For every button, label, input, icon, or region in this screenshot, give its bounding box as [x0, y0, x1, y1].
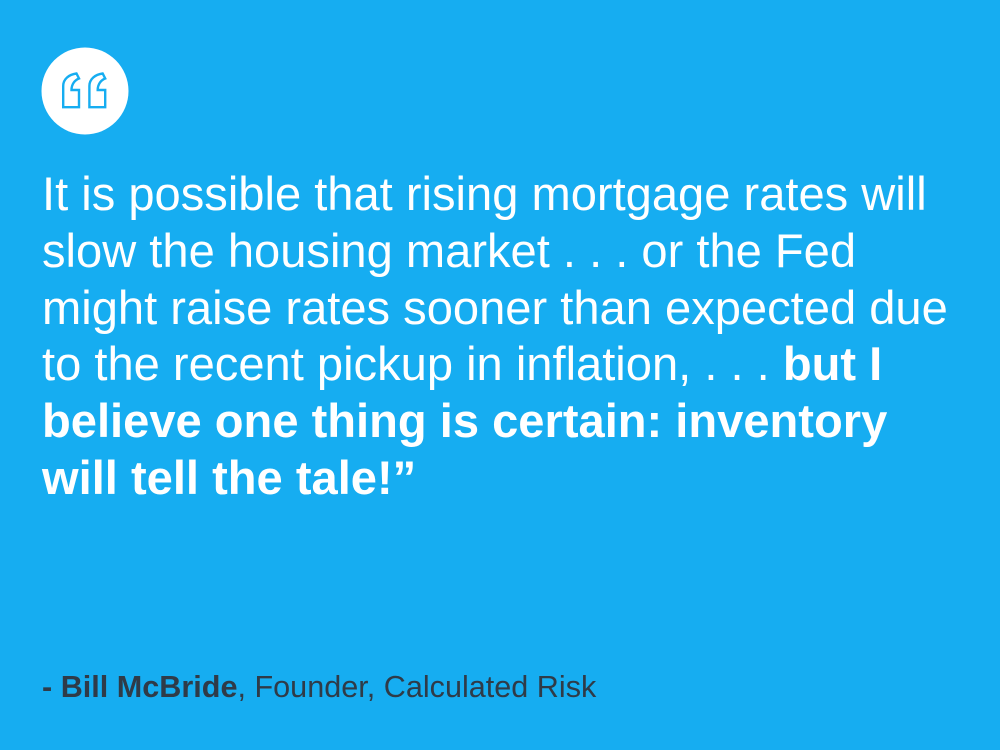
icon: quotation mark badge: [42, 48, 128, 134]
quote text: will tell the tale!”: [42, 451, 416, 504]
attribution: - Bill McBride, Founder, Calculated Risk: [42, 670, 596, 704]
quote text: [42, 167, 948, 504]
quote text: believe one thing is certain: inventory: [42, 394, 887, 447]
quote text: slow the housing market . . . or the Fed: [42, 224, 856, 277]
quote text: might raise rates sooner than expected due: [42, 281, 948, 334]
quote text: to the recent pickup in inflation, . . . but I: [42, 337, 882, 390]
quote text: It is possible that rising mortgage rates will: [42, 167, 927, 220]
